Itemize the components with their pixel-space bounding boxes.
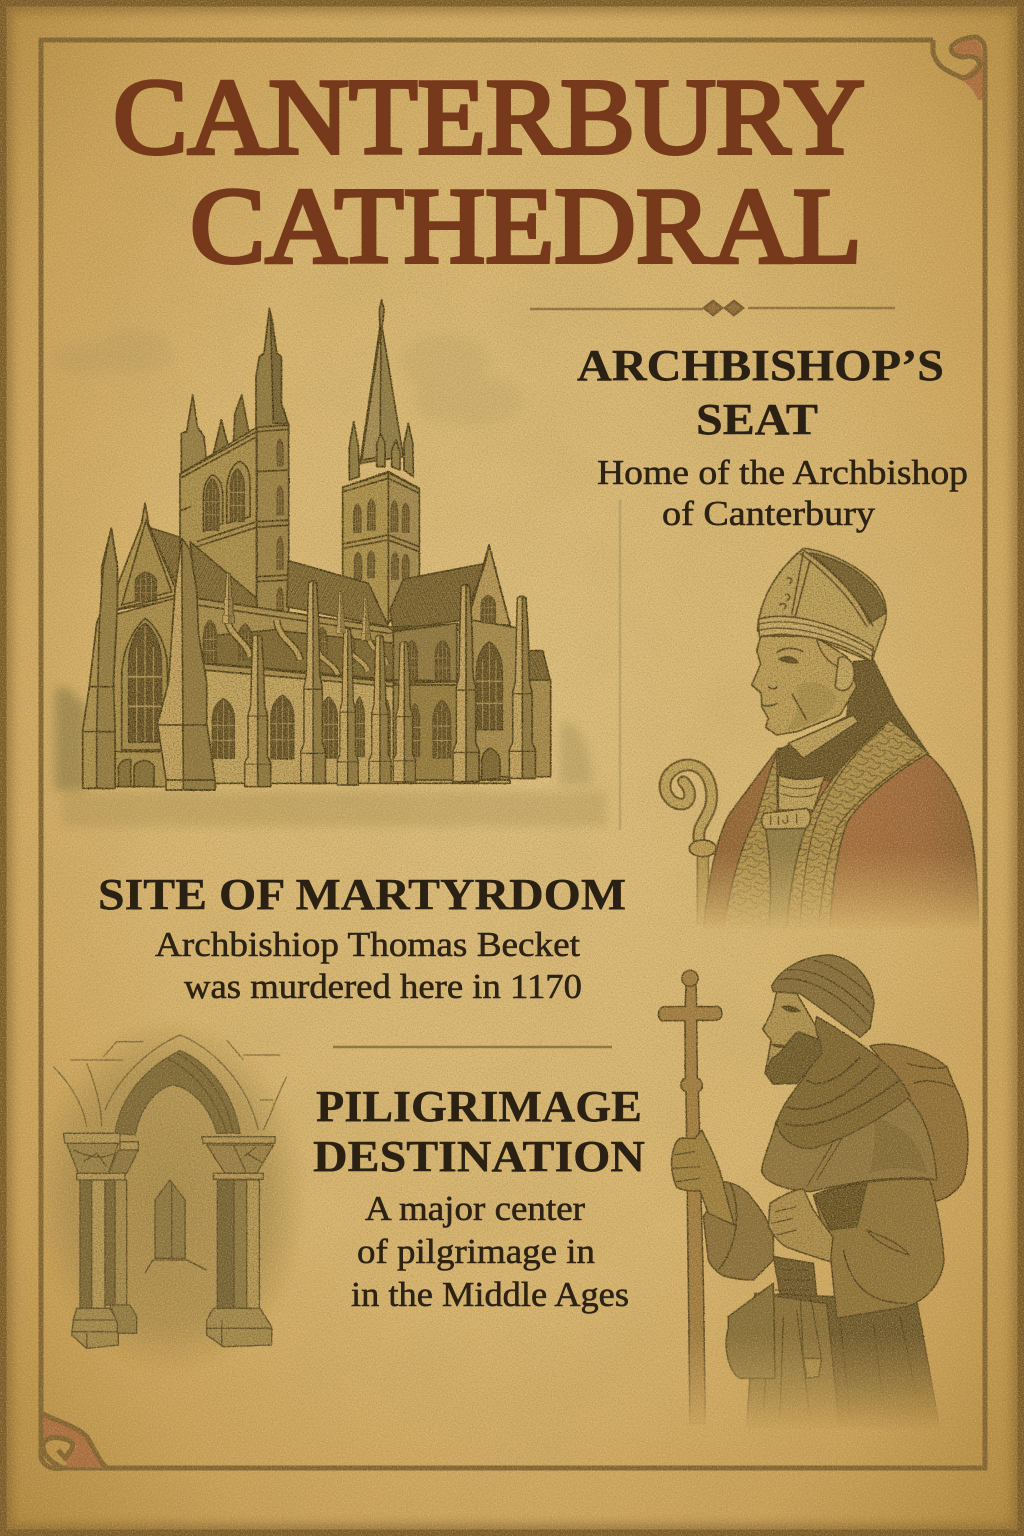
- pouch: [726, 1283, 775, 1378]
- processional cross staff: [658, 970, 722, 1423]
- back chapel: [522, 651, 551, 777]
- dark hood and hair: [778, 660, 927, 787]
- inner shadowed arch band: [115, 1051, 240, 1135]
- corner scroll: bottom left: [41, 1400, 107, 1468]
- right sleeve: [813, 1179, 944, 1318]
- chest panel: [778, 775, 825, 810]
- description: pilgrimage destination: in the Middle Ages: [351, 1275, 629, 1314]
- title: [113, 58, 865, 286]
- cathedral ground: [62, 792, 606, 826]
- title: CANTERBURY: [113, 58, 865, 177]
- lower robe: [747, 1293, 940, 1430]
- illustration: gothic arch: [33, 1020, 307, 1373]
- description: site of martyrdom: was murdered here in 1170: [184, 967, 582, 1006]
- illustration: cathedral: [83, 300, 551, 790]
- hood and scarf: [777, 1017, 910, 1149]
- divider: vertical: [619, 500, 621, 830]
- divider: pilgrimage: [333, 1046, 612, 1048]
- cape: [762, 1097, 937, 1192]
- arch shading: [33, 1020, 307, 1373]
- crozier: [665, 765, 716, 923]
- right column: [202, 1137, 275, 1143]
- robe: [703, 707, 978, 930]
- title: CATHEDRAL: [190, 167, 862, 286]
- heading: pilgrimage destination: DESTINATION: [313, 1132, 645, 1181]
- cap: [772, 955, 874, 1037]
- heading: pilgrimage destination: [313, 1082, 645, 1181]
- description: pilgrimage destination: of pilgrimage in: [357, 1232, 595, 1271]
- orphrey vestment bands: [723, 720, 928, 930]
- left column: [63, 1133, 120, 1143]
- heading: archbishop's seat: ARCHBISHOP’S: [577, 341, 944, 390]
- left sleeve: [703, 1182, 773, 1280]
- centre robe: [766, 829, 804, 919]
- right tower with spire: [343, 300, 419, 623]
- description: archbishop's seat: of Canterbury: [662, 494, 876, 533]
- far window: [155, 1180, 185, 1258]
- right transept: [453, 545, 535, 782]
- left transept: [83, 503, 215, 790]
- divider: title flourish: [530, 301, 895, 315]
- outer arch and masonry: [53, 1035, 287, 1130]
- heading: pilgrimage destination: PILIGRIMAGE: [316, 1082, 642, 1131]
- description: site of martyrdom: Archbishiop Thomas Becket: [155, 925, 580, 964]
- heading: archbishop's seat: [577, 341, 944, 444]
- standing collar: [788, 715, 858, 758]
- main nave: [190, 542, 510, 787]
- illustration: pilgrim: [658, 955, 968, 1430]
- trees beside cathedral: [55, 687, 592, 790]
- heading: site of martyrdom: SITE OF MARTYRDOM: [98, 870, 626, 919]
- backpack: [870, 1044, 968, 1202]
- face: [752, 636, 857, 735]
- description: archbishop's seat: Home of the Archbishop: [597, 453, 968, 492]
- hand on staff: [672, 1130, 734, 1225]
- description: archbishop's seat: [597, 453, 968, 533]
- corner scroll: top right: [933, 37, 985, 110]
- mitre: [757, 548, 886, 662]
- rope belt and tassel: [773, 1257, 817, 1297]
- description: pilgrimage destination: A major center: [365, 1189, 585, 1228]
- left tower: [180, 308, 289, 667]
- hand on chest: [768, 1188, 833, 1262]
- description: site of martyrdom: [155, 925, 582, 1006]
- illustration: archbishop: [665, 548, 978, 930]
- description: pilgrimage destination: [351, 1189, 629, 1314]
- heading: archbishop's seat: SEAT: [696, 395, 818, 444]
- face and beard: [763, 992, 822, 1084]
- background clouds behind cathedral: [50, 330, 525, 426]
